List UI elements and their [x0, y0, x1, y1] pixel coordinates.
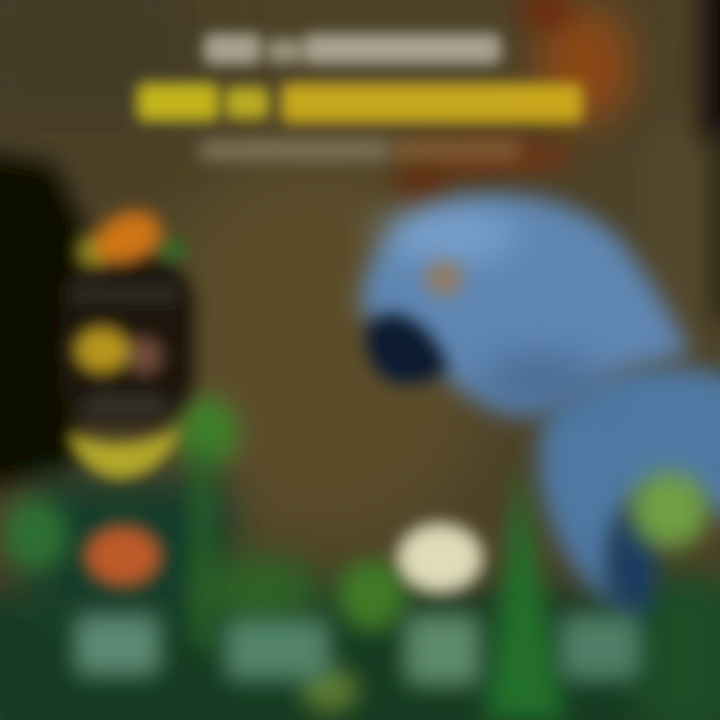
- neck shading: [480, 354, 600, 406]
- label 4: [560, 615, 640, 680]
- icon: parrot: [362, 196, 720, 620]
- icon: banana: [68, 428, 182, 478]
- icon: white egg: [398, 524, 482, 592]
- dark column backing: [60, 255, 195, 425]
- crown highlight: [380, 211, 520, 259]
- label 2: [225, 620, 330, 680]
- wing shadow: [606, 510, 658, 620]
- subtitle: [200, 140, 390, 160]
- icon: fruit slices: [74, 326, 163, 376]
- icon: papaya: [85, 526, 161, 586]
- icon: mango: [77, 202, 186, 274]
- panel: food list: [60, 202, 195, 586]
- parrot eye: [424, 260, 464, 296]
- text line: food 2: [85, 394, 165, 418]
- label 1: [75, 615, 160, 675]
- label 3: [405, 615, 480, 685]
- bottom labels: [75, 615, 640, 685]
- title: [138, 35, 582, 160]
- parrot head: [362, 196, 690, 413]
- foliage: green plants along the bottom: [0, 396, 720, 720]
- parrot beak: [364, 312, 448, 385]
- text line: food 1: [70, 284, 180, 304]
- title line 1: [205, 35, 500, 63]
- parrot body: [539, 368, 720, 610]
- title line 2: [138, 84, 582, 122]
- icon: green fruit: [632, 472, 708, 548]
- decoration: orange foliage top right: [392, 0, 633, 205]
